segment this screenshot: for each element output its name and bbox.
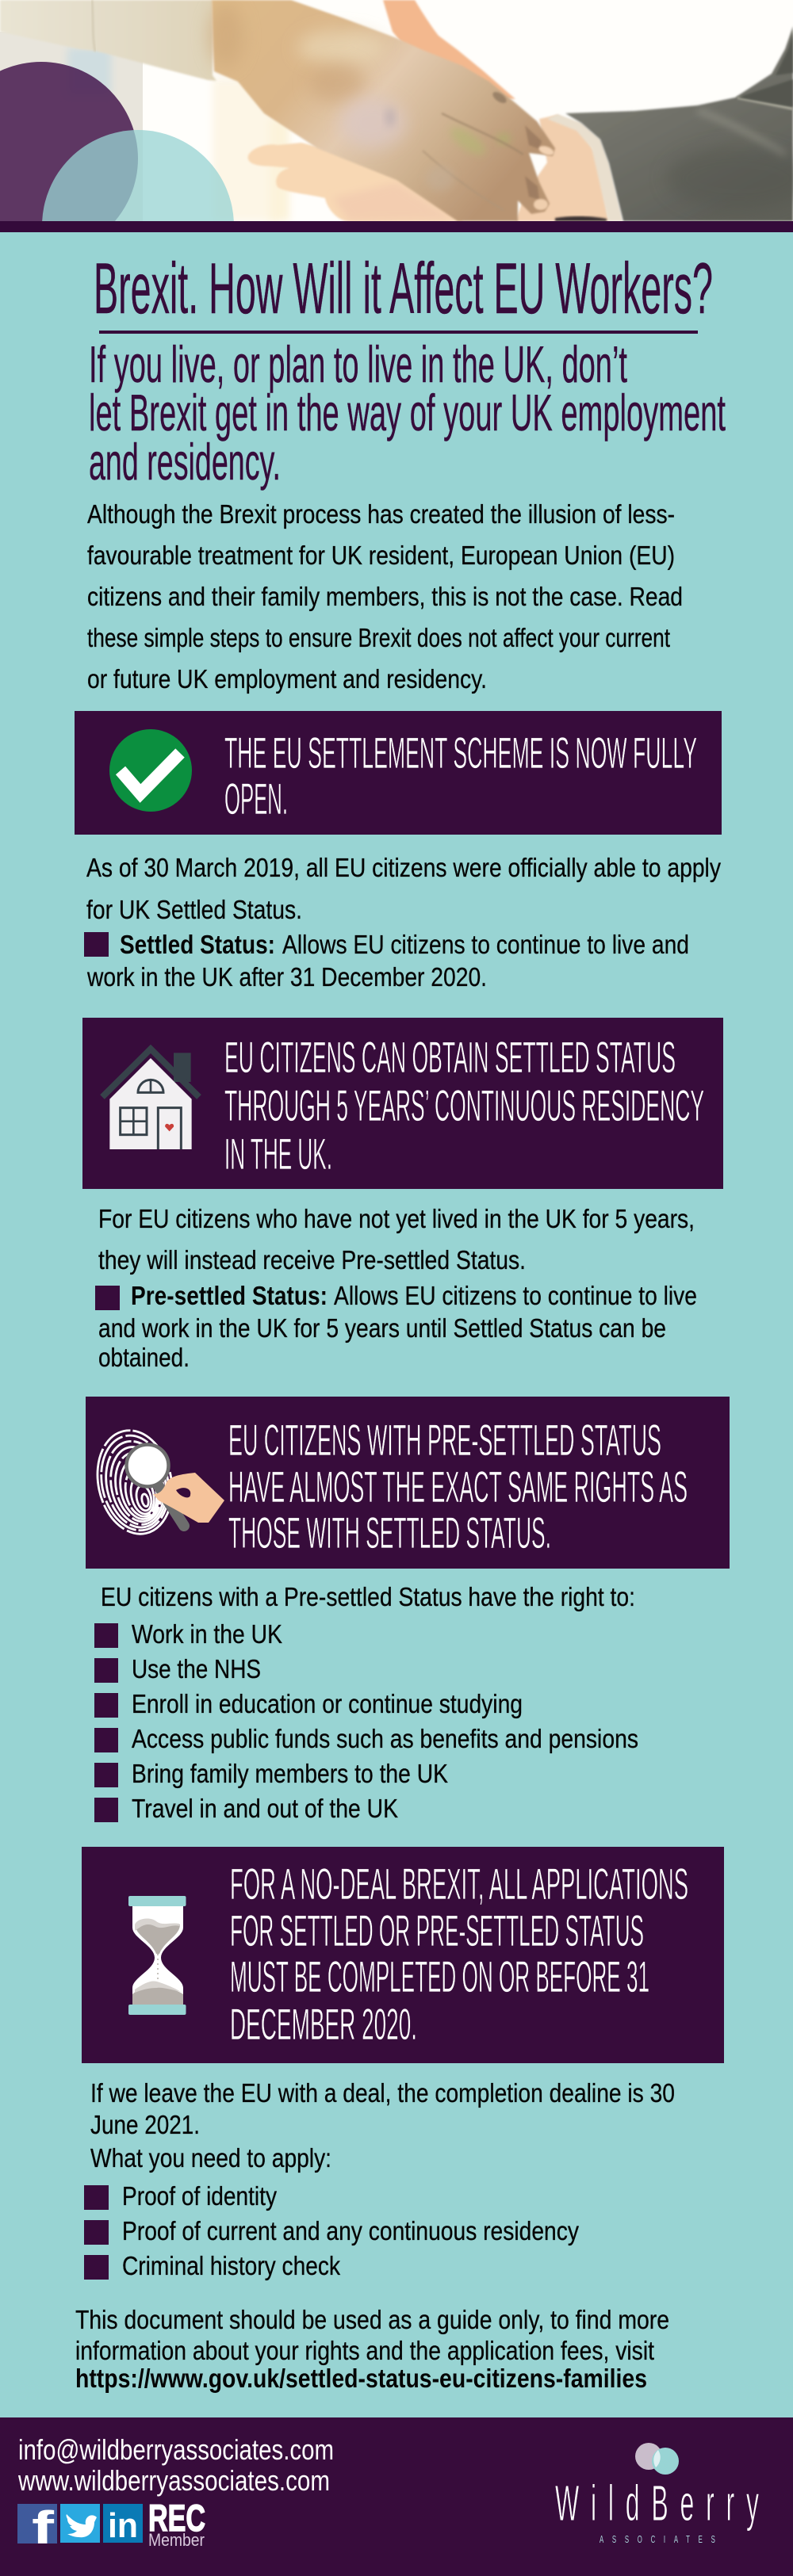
list: what you need: Proof of identity <box>122 2182 277 2211</box>
text: pre-settled status: Allows EU citizens to continue to live <box>334 1282 697 1311</box>
panel: same rights <box>86 1397 730 1569</box>
list: rights: Work in the UK <box>132 1620 282 1649</box>
icon: facebook <box>17 2502 57 2554</box>
list: what you need <box>84 2182 579 2281</box>
text: pre-settled status: Pre-settled Status: <box>131 1282 328 1311</box>
text: closing note and link: https://www.gov.uk/settled-status-eu-citizens-families <box>75 2364 647 2394</box>
heading: same rights <box>228 1415 688 1557</box>
icon: house <box>102 1049 199 1149</box>
aqua circle <box>42 130 234 221</box>
text: closing note and link <box>75 2306 669 2394</box>
intro paragraph: favourable treatment for UK resident, European Union (EU) <box>87 541 675 571</box>
logo: WildBerry Associates <box>555 2443 759 2546</box>
text: deal deadline <box>90 2079 675 2173</box>
logo: WildBerry Associates: WildBerry <box>555 2475 759 2532</box>
list: rights <box>94 1620 638 1824</box>
list: rights: Use the NHS <box>132 1655 261 1684</box>
icon: fingerprint and magnifier <box>88 1424 224 1541</box>
panel: settlement scheme open <box>75 711 722 835</box>
text: settled status: Allows EU citizens to continue to live and <box>282 931 689 960</box>
text: closing note and link: information about your rights and the application fees, visit <box>75 2337 655 2366</box>
intro paragraph <box>87 500 683 694</box>
text: pre-settled status: obtained. <box>98 1343 190 1373</box>
text: pre-settled status <box>95 1205 697 1373</box>
icon: twitter <box>60 2504 100 2543</box>
text: deal deadline: June 2021. <box>90 2111 200 2140</box>
heading: five years residency: IN THE UK. <box>224 1129 332 1179</box>
text: pre-settled status: they will instead receive Pre-settled Status. <box>98 1246 526 1275</box>
text: deal deadline: If we leave the EU with a deal, the completion dealine is 30 <box>90 2079 675 2108</box>
list: rights: Enroll in education or continue studying <box>132 1690 523 1719</box>
heading: no-deal deadline: DECEMBER 2020. <box>230 1999 417 2049</box>
icon: green check mark <box>109 729 192 812</box>
intro paragraph: Although the Brexit process has created the illusion of less- <box>87 500 675 529</box>
text: settled status: Settled Status: <box>120 931 275 960</box>
logo: WildBerry Associates: ASSOCIATES <box>600 2534 715 2546</box>
text: pre-settled status: For EU citizens who have not yet lived in the UK for 5 years, <box>98 1205 695 1234</box>
logo: REC member <box>148 2497 205 2550</box>
contact details: www.wildberryassociates.com <box>17 2464 330 2497</box>
header band <box>0 221 793 232</box>
subtitle <box>89 335 726 491</box>
panel: five years residency <box>82 1018 723 1189</box>
logo: REC member: Member <box>148 2530 205 2550</box>
text: settled status: work in the UK after 31 December 2020. <box>86 963 487 992</box>
list: what you need: Proof of current and any continuous residency <box>122 2217 579 2246</box>
text: rights intro: EU citizens with a Pre-settled Status have the right to: <box>101 1583 635 1612</box>
icon: facebook: f <box>32 2502 55 2554</box>
text: deal deadline: What you need to apply: <box>90 2144 331 2173</box>
text: settled status <box>84 854 721 992</box>
heading: five years residency <box>224 1032 704 1179</box>
header photo: handshake <box>0 0 793 221</box>
subtitle: and residency. <box>89 433 281 491</box>
text: settled status: for UK Settled Status. <box>86 896 302 925</box>
list: what you need: Criminal history check <box>122 2252 340 2281</box>
heading: settlement scheme <box>224 728 697 824</box>
purple circle <box>0 62 138 221</box>
contact details: info@wildberryassociates.com <box>18 2433 334 2466</box>
heading: settlement scheme: OPEN. <box>224 774 288 824</box>
contact details <box>17 2433 334 2497</box>
intro paragraph: or future UK employment and residency. <box>87 665 487 694</box>
footer <box>0 2417 793 2576</box>
icon: hourglass <box>128 1896 186 2015</box>
list: rights: Travel in and out of the UK <box>132 1794 398 1824</box>
panel: no-deal deadline <box>82 1847 724 2063</box>
heading: no-deal deadline <box>230 1859 688 2049</box>
list: rights: Bring family members to the UK <box>132 1760 448 1789</box>
text: closing note and link: This document should be used as a guide only, to find more <box>75 2306 669 2335</box>
text: pre-settled status: and work in the UK for 5 years until Settled Status can be <box>98 1314 666 1343</box>
logo: REC member: REC <box>148 2497 205 2539</box>
intro paragraph: citizens and their family members, this is not the case. Read <box>87 583 683 612</box>
icon: linkedin: in <box>108 2506 138 2545</box>
list: rights: Access public funds such as benefits and pensions <box>132 1725 638 1754</box>
